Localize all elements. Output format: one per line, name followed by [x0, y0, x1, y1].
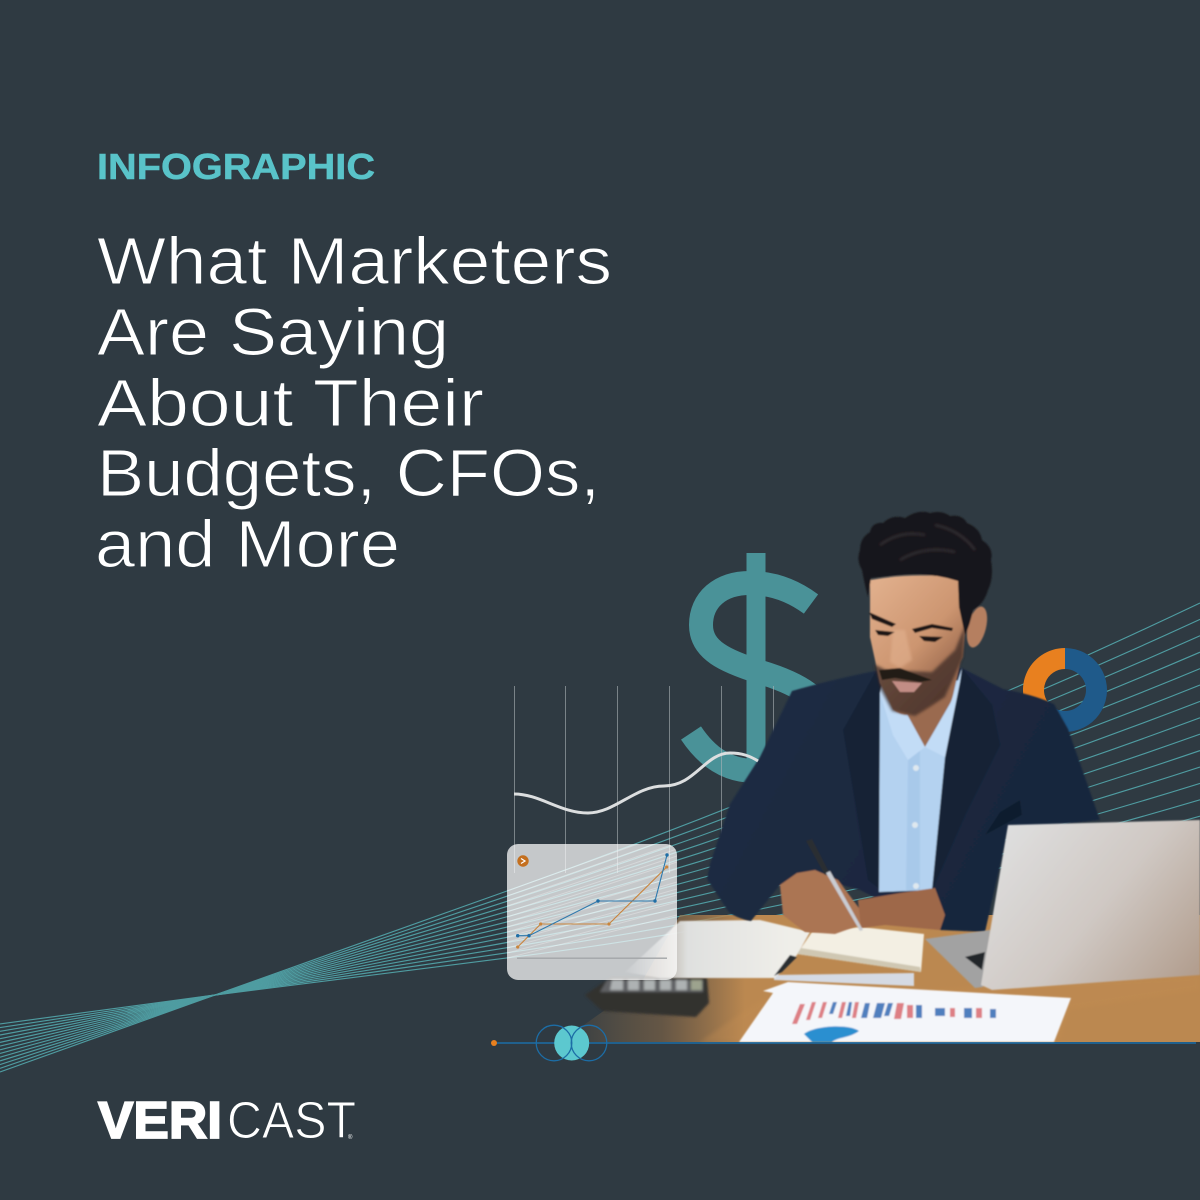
- icon: dollar sign: [691, 553, 826, 790]
- laptop base: [925, 930, 990, 988]
- ear: [963, 604, 991, 650]
- blue series: [516, 853, 669, 937]
- title: Budgets, CFOs,: [97, 436, 600, 511]
- photo: laptop: [925, 820, 1200, 990]
- eyebrow label: INFOGRAPHIC: INFOGRAPHIC: [97, 146, 375, 187]
- logo: Vericast: CAST: [227, 1092, 356, 1150]
- wood grain: [700, 975, 1200, 1042]
- collar: [880, 668, 962, 760]
- face: [870, 575, 966, 715]
- title: What Marketers: [97, 224, 612, 299]
- nose highlight: [890, 630, 912, 668]
- orange start dot: [491, 1040, 497, 1046]
- mouth: [892, 681, 922, 692]
- eyebrows and eyes: [869, 612, 953, 642]
- title: About Their: [97, 366, 484, 441]
- logo: Vericast: [98, 1092, 356, 1150]
- chart baseline: [517, 958, 667, 959]
- title: Are Saying: [97, 295, 449, 370]
- filled circle: [554, 1026, 589, 1060]
- jacket: [707, 668, 1100, 932]
- laptop lid: [981, 820, 1200, 990]
- white trend curve: [514, 753, 758, 813]
- paper with charts: [739, 982, 1071, 1042]
- lines showing through panel: [507, 844, 677, 958]
- outline circles: [536, 1025, 607, 1061]
- shirt: [879, 680, 960, 892]
- hair: [858, 512, 992, 635]
- photo: man at desk: [707, 512, 1100, 934]
- icon: donut chart: [1023, 648, 1107, 732]
- title: and More: [95, 507, 400, 582]
- beard: [874, 625, 965, 716]
- pen: [806, 839, 863, 931]
- title: [95, 224, 612, 582]
- decorative fan of teal lines: [0, 603, 1200, 1072]
- hair highlights: [880, 525, 975, 560]
- vertical grid lines: [514, 686, 774, 873]
- icon: orange badge: [517, 855, 529, 867]
- panel background: [507, 844, 677, 980]
- neck: [884, 655, 962, 747]
- hands: [780, 870, 862, 934]
- table top: [560, 915, 1200, 1042]
- logo: Vericast: ®: [348, 1134, 353, 1141]
- orange series: [516, 865, 668, 949]
- timeline rule: [494, 1042, 1196, 1044]
- photo: desk: [560, 915, 1200, 1042]
- notebook: [625, 920, 924, 986]
- moustache: [879, 668, 932, 682]
- jacket lapels: [843, 668, 1000, 890]
- timeline with circles: [491, 1025, 1196, 1061]
- chart panel: [507, 830, 677, 980]
- calculator: [585, 977, 709, 1017]
- logo: Vericast: VERI: [98, 1092, 222, 1150]
